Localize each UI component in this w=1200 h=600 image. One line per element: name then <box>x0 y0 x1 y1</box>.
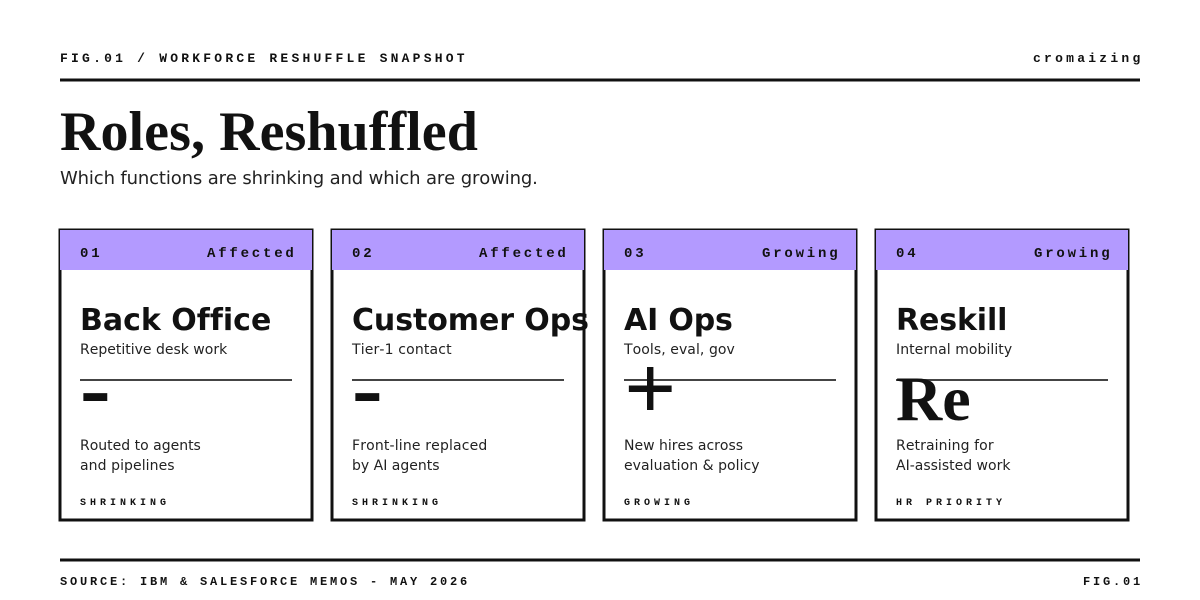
title: Roles, Reshuffled <box>60 101 478 163</box>
card 01 status: SHRINKING <box>80 498 170 509</box>
card 04 header band <box>876 230 1128 270</box>
card 04 symbol: re: Re <box>896 363 971 434</box>
card 01 description: Routed to agents <box>80 438 201 454</box>
panel: card 03 ai ops <box>604 230 856 509</box>
card 03 tag: Growing <box>762 246 840 262</box>
card 03 description <box>624 438 760 474</box>
card 02 description: by AI agents <box>352 458 440 474</box>
panel: card 04 reskill <box>876 230 1128 509</box>
card 04 description: AI-assisted work <box>896 458 1010 474</box>
card 03 symbol: plus: + <box>624 337 676 439</box>
card 04 status: HR PRIORITY <box>896 498 1006 509</box>
card 01 description: and pipelines <box>80 458 175 474</box>
card 04 tag: Growing <box>1034 246 1112 262</box>
card 01 symbol: minus: - <box>80 337 111 439</box>
card 02 tag: Affected <box>479 246 569 262</box>
card 02 symbol: minus: - <box>352 337 383 439</box>
card 03 name: AI Ops <box>624 303 733 338</box>
card 02 name: Customer Ops <box>352 303 589 338</box>
card 01 header band <box>60 230 312 270</box>
card 04 subtitle: Internal mobility <box>896 342 1012 358</box>
card 02 status: SHRINKING <box>352 498 442 509</box>
card 01 tag: Affected <box>207 246 297 262</box>
card 04 name: Reskill <box>896 303 1007 338</box>
card 03 status: GROWING <box>624 498 694 509</box>
card 04 number: 04 <box>896 246 918 262</box>
figure label: FIG.01 <box>1083 575 1143 589</box>
card 02 header band <box>332 230 584 270</box>
card 02 subtitle: Tier-1 contact <box>352 342 452 358</box>
card 04 description <box>896 438 1010 474</box>
card 01 name: Back Office <box>80 303 271 338</box>
source footer: SOURCE: IBM & SALESFORCE MEMOS - MAY 2026 <box>60 575 470 589</box>
panel: card 02 customer ops <box>332 230 589 509</box>
card 04 description: Retraining for <box>896 438 994 454</box>
card 01 subtitle: Repetitive desk work <box>80 342 227 358</box>
header kicker: FIG.01 / WORKFORCE RESHUFFLE SNAPSHOT <box>60 51 468 66</box>
brand label: cromaizing <box>1033 51 1144 66</box>
card 01 description <box>80 438 201 474</box>
panel: card 01 back office <box>60 230 312 509</box>
card 03 header band <box>604 230 856 270</box>
card 03 number: 03 <box>624 246 646 262</box>
card 02 description <box>352 438 487 474</box>
card 01 number: 01 <box>80 246 102 262</box>
card 02 description: Front-line replaced <box>352 438 487 454</box>
card 03 description: New hires across <box>624 438 743 454</box>
card 03 subtitle: Tools, eval, gov <box>624 342 735 358</box>
subtitle: Which functions are shrinking and which are growing. <box>60 168 538 189</box>
card 03 description: evaluation & policy <box>624 458 760 474</box>
card 02 number: 02 <box>352 246 374 262</box>
